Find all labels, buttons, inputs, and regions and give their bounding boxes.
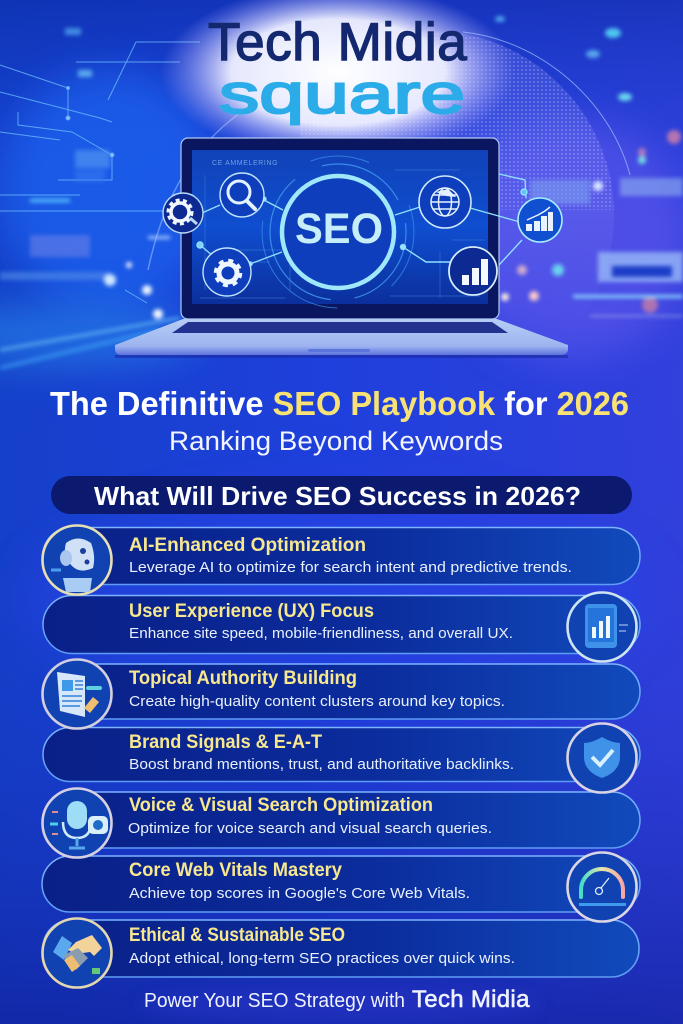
icon: bar chart	[449, 247, 497, 295]
panel: AI-Enhanced Optimization: Leverage AI to optimize for search intent and predictive trends.	[129, 559, 572, 576]
connector lines	[197, 174, 527, 266]
circuit lines left	[0, 42, 200, 303]
icon: voice and camera	[42, 788, 112, 858]
icon: mobile chart	[568, 592, 636, 662]
panel: Core Web Vitals Mastery: Achieve top scores in Google's Core Web Vitals.	[129, 885, 470, 902]
footer line	[144, 986, 530, 1013]
logo: square: square	[219, 62, 465, 125]
panel: Core Web Vitals Mastery: Core Web Vitals Mastery	[129, 860, 342, 881]
panel: Brand Signals and E-A-T: Brand Signals & E-A-T	[129, 732, 322, 753]
footer line: Power Your SEO Strategy with	[144, 990, 405, 1012]
panel: Ethical and Sustainable SEO: Adopt ethical, long-term SEO practices over quick wins.	[129, 950, 515, 967]
panel: Topical Authority Building	[43, 664, 640, 719]
panel: User Experience (UX) Focus: Enhance site speed, mobile-friendliness, and overall UX.	[129, 625, 513, 642]
panel: Voice and Visual Search Optimization: Optimize for voice search and visual search queries.	[128, 820, 492, 837]
icon: globe	[419, 176, 471, 228]
laptop base	[115, 319, 568, 358]
section heading pill: What Will Drive SEO Success in 2026?	[94, 481, 581, 511]
panel: User Experience (UX) Focus	[43, 596, 640, 654]
laptop screen	[181, 138, 499, 319]
laptop	[115, 138, 568, 358]
logo: Tech Midia: Tech Midia	[208, 13, 467, 72]
panel: Brand Signals and E-A-T	[43, 728, 640, 782]
panel: Topical Authority Building: Topical Authority Building	[129, 668, 357, 689]
laptop screen: CE AMMELERING	[212, 160, 278, 167]
icon: speed gauge	[568, 852, 636, 922]
icon: search	[220, 173, 264, 217]
panel: AI-Enhanced Optimization: AI-Enhanced Optimization	[129, 535, 366, 556]
panel: Voice and Visual Search Optimization	[43, 792, 640, 848]
logo	[208, 13, 467, 125]
panel: Brand Signals and E-A-T: Boost brand mentions, trust, and authoritative backlinks.	[129, 756, 514, 773]
panel: User Experience (UX) Focus: User Experience (UX) Focus	[129, 601, 374, 622]
icon: content document	[42, 660, 112, 728]
title: The Definitive SEO Playbook for 2026	[50, 385, 629, 422]
subtitle: Ranking Beyond Keywords	[169, 426, 503, 456]
icon: gear	[203, 248, 251, 296]
panel: Voice and Visual Search Optimization: Voice & Visual Search Optimization	[129, 795, 433, 816]
panel: Topical Authority Building: Create high-quality content clusters around key topics.	[129, 693, 505, 710]
icon: AI robot	[42, 526, 112, 594]
icon: gear cursor	[163, 193, 203, 233]
icon: handshake	[42, 918, 112, 988]
panel: AI-Enhanced Optimization	[43, 528, 640, 584]
globe network backdrop	[147, 32, 630, 270]
panel: Ethical and Sustainable SEO	[43, 920, 639, 977]
icon: growth chart	[518, 198, 562, 242]
icon: shield check	[568, 724, 636, 792]
footer line: Tech Midia	[412, 986, 530, 1013]
panel: Core Web Vitals Mastery	[42, 856, 640, 912]
light streaks and bokeh	[0, 16, 683, 368]
SEO badge: SEO	[295, 205, 383, 253]
panel: Ethical and Sustainable SEO: Ethical & Sustainable SEO	[129, 925, 345, 946]
logo glow	[160, 0, 516, 160]
section heading pill	[51, 476, 632, 514]
SEO badge	[282, 176, 394, 288]
